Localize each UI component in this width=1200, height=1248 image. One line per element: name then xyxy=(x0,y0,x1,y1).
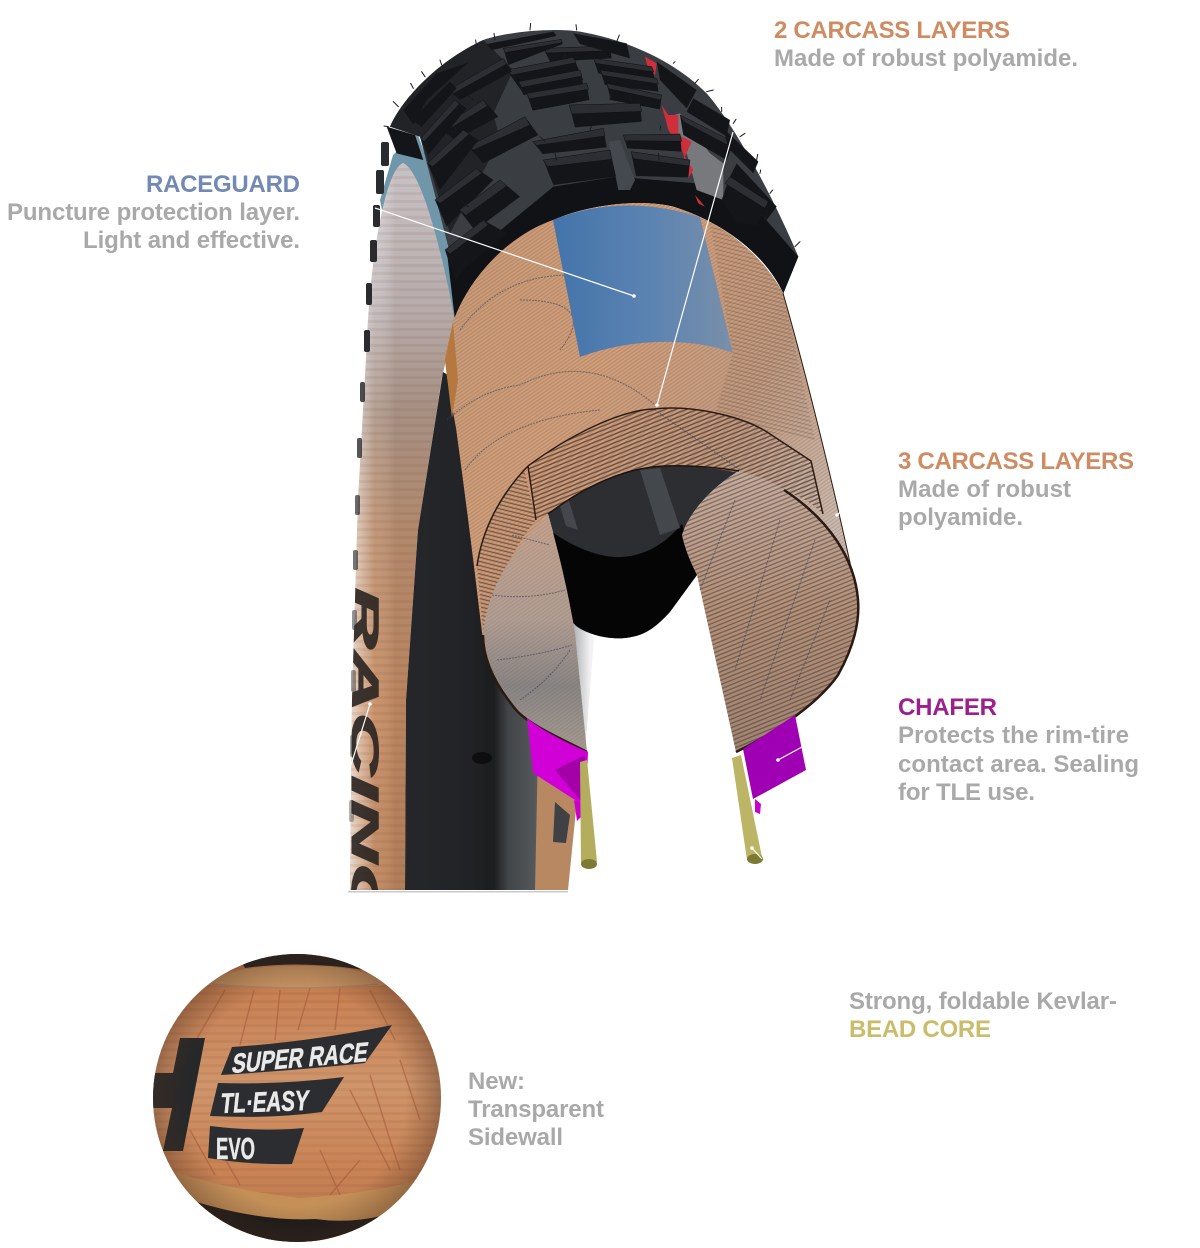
callout line: bead core xyxy=(750,846,762,859)
super race tag: SUPER RACE xyxy=(230,1036,370,1079)
chafer left xyxy=(527,718,588,821)
label: transparent sidewall: Sidewall xyxy=(468,1124,563,1151)
bead core left xyxy=(580,760,597,869)
tread knobs xyxy=(387,32,777,280)
lower black band xyxy=(447,177,798,320)
label: bead core: Strong, foldable Kevlar- xyxy=(849,988,1117,1015)
sidewall lettering: RACING xyxy=(343,586,385,931)
tire illustration xyxy=(343,23,858,931)
label: 3 carcass layers: polyamide. xyxy=(898,504,1023,531)
left inner sleeve xyxy=(483,514,587,752)
fold line xyxy=(477,408,823,566)
label: transparent sidewall: New: xyxy=(468,1068,525,1095)
label: transparent sidewall: Transparent xyxy=(468,1096,604,1123)
wheel rim xyxy=(405,372,594,890)
dark left shoulder xyxy=(390,40,513,233)
label: chafer: contact area. Sealing xyxy=(898,751,1139,778)
black letter shape xyxy=(153,1038,205,1151)
red radial threads xyxy=(190,988,420,1195)
gray mud patch xyxy=(668,113,723,200)
label: bead core xyxy=(849,988,1117,1043)
label: 3 carcass layers: Made of robust xyxy=(898,476,1071,503)
label: chafer: Protects the rim-tire xyxy=(898,722,1129,749)
label: raceguard: Light and effective. xyxy=(83,227,300,254)
evo tag: EVO xyxy=(216,1131,255,1166)
callout line: transparent sidewall xyxy=(351,702,372,765)
label: raceguard xyxy=(7,171,300,254)
label: 2 carcass layers xyxy=(774,17,1078,72)
tread xyxy=(384,23,800,320)
tread hairs xyxy=(384,23,800,247)
left edge stain xyxy=(445,322,458,418)
sidewall side knobs xyxy=(349,142,389,822)
left sidewall xyxy=(350,163,454,890)
centre tread ridge xyxy=(608,140,635,190)
rim interior xyxy=(548,466,739,638)
edge vignette xyxy=(152,953,442,1243)
label: chafer: for TLE use. xyxy=(898,779,1035,806)
bead core right xyxy=(732,755,763,864)
label: raceguard: Puncture protection layer. xyxy=(7,199,300,226)
label: 2 carcass layers: 2 CARCASS LAYERS xyxy=(774,17,1010,44)
label: 3 carcass layers xyxy=(898,448,1134,531)
black bottom xyxy=(198,1202,380,1242)
tan top band xyxy=(205,966,392,988)
black top arc xyxy=(243,954,363,970)
label: chafer xyxy=(898,694,1139,806)
sidewall detail circle xyxy=(150,950,445,1248)
raceguard layer xyxy=(553,205,733,357)
right inner sleeve xyxy=(682,471,858,752)
tan bottom band xyxy=(175,1172,420,1245)
label: raceguard: RACEGUARD xyxy=(146,171,300,198)
callout line: raceguard xyxy=(375,208,636,298)
label: bead core: BEAD CORE xyxy=(849,1016,991,1043)
opening edge xyxy=(548,466,739,514)
label: transparent sidewall xyxy=(468,1068,604,1151)
chafer right xyxy=(743,715,806,814)
bottom edge line xyxy=(348,891,568,892)
fold band coarse weave xyxy=(528,408,823,520)
tread base xyxy=(390,30,798,320)
tl-easy tag: TL·EASY xyxy=(220,1085,311,1119)
red patches xyxy=(645,57,705,207)
carcass outer layer xyxy=(445,203,858,640)
callout line: 2 carcass layers xyxy=(655,132,733,407)
right outer edge xyxy=(783,293,858,600)
faint seam lines xyxy=(447,275,740,470)
callout line: 3 carcass layers xyxy=(835,508,845,517)
right sidewall xyxy=(535,750,582,890)
label: 3 carcass layers: 3 CARCASS LAYERS xyxy=(898,448,1134,475)
teal tread edge xyxy=(380,132,476,335)
label: chafer: CHAFER xyxy=(898,694,997,721)
label: 2 carcass layers: Made of robust polyamide. xyxy=(774,45,1078,72)
callout line: chafer xyxy=(776,747,802,762)
evo tag xyxy=(208,1126,304,1166)
